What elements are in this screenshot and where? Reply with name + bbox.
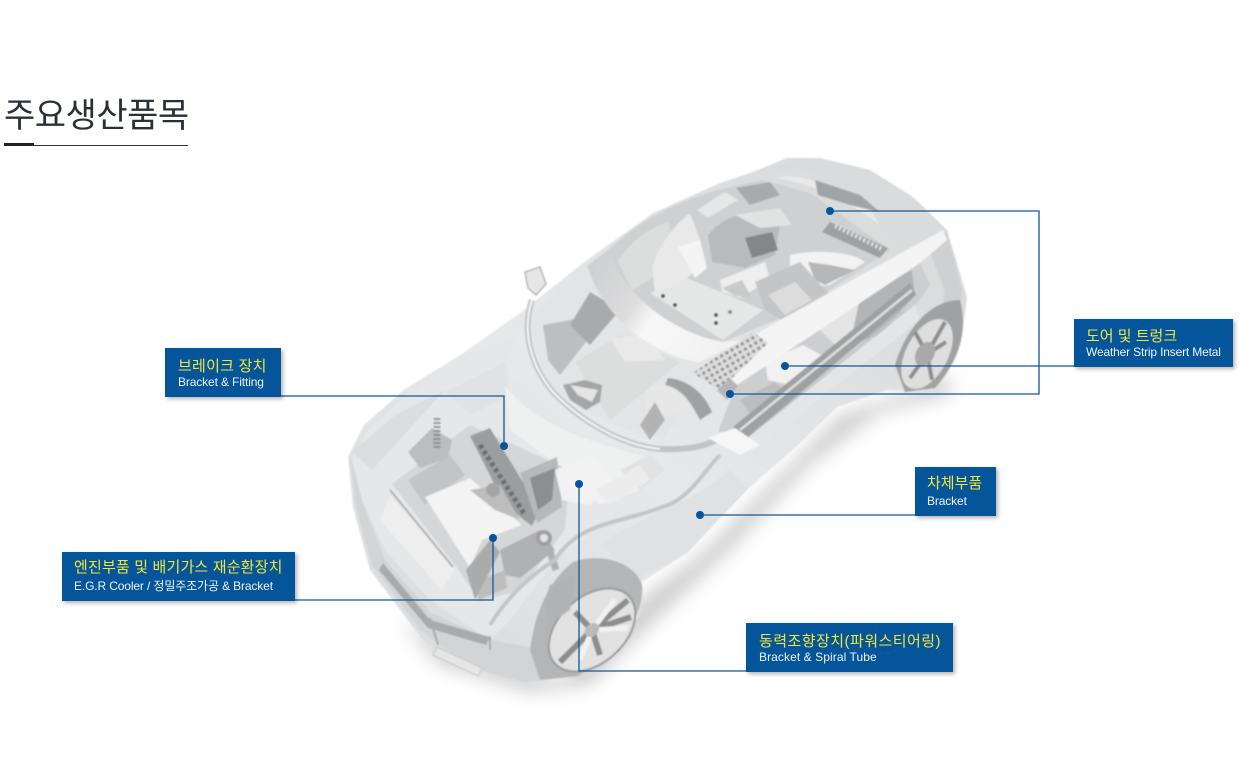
roof bow: [587, 250, 744, 362]
rear wheel: [891, 300, 963, 397]
rear deck: [760, 161, 945, 235]
callout: body parts: 차체부품: [927, 475, 982, 492]
title: [4, 90, 188, 146]
hood: [352, 335, 640, 640]
callout: body parts: [915, 467, 996, 516]
cowl light area: [505, 385, 640, 505]
brake hub: [545, 575, 575, 625]
callout: brake: 브레이크 장치: [178, 358, 267, 375]
door interior: [718, 263, 930, 432]
callout lines: [281, 211, 1074, 671]
windshield frame: [528, 300, 716, 449]
callout dots: [489, 207, 834, 542]
title: 주요생산품목: [4, 97, 189, 135]
callout: brake: [165, 348, 281, 397]
ground shadow: [400, 375, 950, 692]
callout: power steering: 동력조향장치(파워스티어링): [759, 633, 941, 650]
callout: power steering: [746, 623, 953, 672]
engine bay: [392, 418, 665, 602]
callout: doors and trunk: Weather Strip Insert Metal: [1086, 345, 1221, 359]
callout: power steering: Bracket & Spiral Tube: [759, 650, 877, 664]
car body: [348, 158, 967, 683]
front glass: [534, 268, 700, 438]
front tire: [530, 558, 642, 680]
side rail: [707, 230, 947, 385]
rear interior: [618, 177, 888, 340]
fender line: [490, 455, 720, 625]
mirror: [525, 267, 546, 295]
callout: body parts: Bracket: [927, 494, 967, 508]
radiator: [390, 490, 453, 567]
front wheel rim: [533, 572, 651, 688]
callout: engine: 엔진부품 및 배기가스 재순환장치: [74, 559, 283, 576]
callout: doors and trunk: 도어 및 트렁크: [1086, 328, 1177, 345]
callout: brake: Bracket & Fitting: [178, 375, 264, 389]
callout: doors and trunk: [1074, 319, 1233, 367]
front fascia: [350, 455, 545, 682]
rear glass: [608, 180, 890, 342]
car: [348, 158, 967, 692]
callout: engine: [62, 552, 295, 601]
sill stripes: [733, 283, 916, 440]
callout: engine: E.G.R Cooler / 정밀주조가공 & Bracket: [74, 579, 273, 593]
halftone panel: [693, 332, 768, 390]
